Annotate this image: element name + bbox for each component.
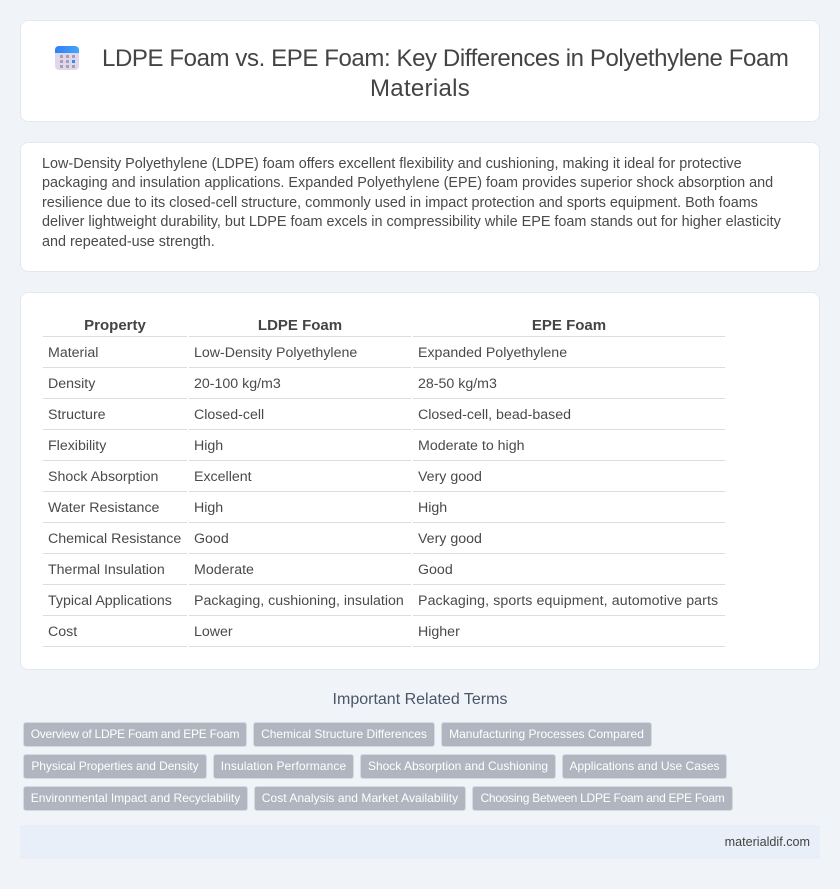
table rows: Closed-cell, bead-based — [418, 407, 571, 423]
table rows: Good — [418, 562, 453, 578]
panel: comparison table — [20, 292, 820, 670]
related term chips: Applications and Use Cases — [569, 759, 720, 773]
table rows: Cost — [48, 624, 77, 640]
table rows: Water Resistance — [48, 500, 159, 516]
title — [102, 45, 789, 102]
table rows: Thermal Insulation — [48, 562, 165, 578]
related term chips: Shock Absorption and Cushioning — [368, 759, 548, 773]
related term chips: Environmental Impact and Recyclability — [31, 791, 240, 805]
table rows: Moderate — [194, 562, 254, 578]
header panel — [20, 20, 820, 122]
intro paragraph: deliver lightweight durability, but LDPE foam excels in compressibility while EPE foam stands out for higher elasticity — [42, 214, 781, 230]
table rows: Expanded Polyethylene — [418, 345, 567, 361]
intro paragraph: resilience due to its closed-cell structure, commonly used in impact protection and sports equipment. Both foams — [42, 194, 758, 210]
icon: calendar grid — [55, 46, 79, 70]
table rows: Low-Density Polyethylene — [194, 345, 357, 361]
related term chips: Insulation Performance — [221, 759, 346, 773]
table rows: Flexibility — [48, 438, 106, 454]
table header: LDPE Foam — [258, 317, 342, 334]
title: LDPE Foam vs. EPE Foam: Key Differences in Polyethylene Foam — [102, 45, 789, 72]
table rows: Packaging, sports equipment, automotive parts — [418, 593, 718, 609]
table rows: Very good — [418, 469, 482, 485]
table rows: Density — [48, 376, 95, 392]
table rows: Moderate to high — [418, 438, 524, 454]
table rows: Material — [48, 345, 98, 361]
related term chips — [23, 722, 733, 811]
related term chips: Physical Properties and Density — [31, 759, 199, 773]
related term chips: Choosing Between LDPE Foam and EPE Foam — [480, 791, 724, 805]
related term chips: Manufacturing Processes Compared — [449, 727, 644, 741]
table rows: Higher — [418, 624, 460, 640]
related term chips: Chemical Structure Differences — [261, 727, 427, 741]
table rows: High — [194, 500, 223, 516]
table rows: Very good — [418, 531, 482, 547]
intro paragraph: and repeated-use strength. — [42, 234, 215, 250]
table rows: 28-50 kg/m3 — [418, 376, 497, 392]
table rows: Chemical Resistance — [48, 531, 181, 547]
table rows: Excellent — [194, 469, 252, 485]
table rows: Lower — [194, 624, 233, 640]
intro paragraph — [42, 156, 781, 250]
intro paragraph: packaging and insulation applications. Expanded Polyethylene (EPE) foam provides superior shock absorption and — [42, 175, 773, 191]
footer site name: materialdif.com — [725, 835, 810, 849]
intro paragraph: Low-Density Polyethylene (LDPE) foam offers excellent flexibility and cushioning, making it ideal for protective — [42, 156, 742, 172]
table rows: 20-100 kg/m3 — [194, 376, 281, 392]
table rows: High — [194, 438, 223, 454]
table rows: High — [418, 500, 447, 516]
table rows — [43, 336, 725, 647]
related term chips: Cost Analysis and Market Availability — [262, 791, 458, 805]
related terms heading: Important Related Terms — [333, 691, 507, 708]
table rows: Shock Absorption — [48, 469, 158, 485]
table rows: Packaging, cushioning, insulation — [194, 593, 404, 609]
footer bar — [20, 825, 820, 859]
related term chips: Overview of LDPE Foam and EPE Foam — [31, 727, 239, 741]
table rows: Closed-cell — [194, 407, 264, 423]
table header — [84, 317, 606, 334]
table rows: Structure — [48, 407, 106, 423]
table rows: Typical Applications — [48, 593, 172, 609]
title: Materials — [370, 75, 470, 102]
table header: Property — [84, 317, 146, 334]
table header: EPE Foam — [532, 317, 606, 334]
table rows: Good — [194, 531, 229, 547]
panel: introduction text — [20, 142, 820, 272]
